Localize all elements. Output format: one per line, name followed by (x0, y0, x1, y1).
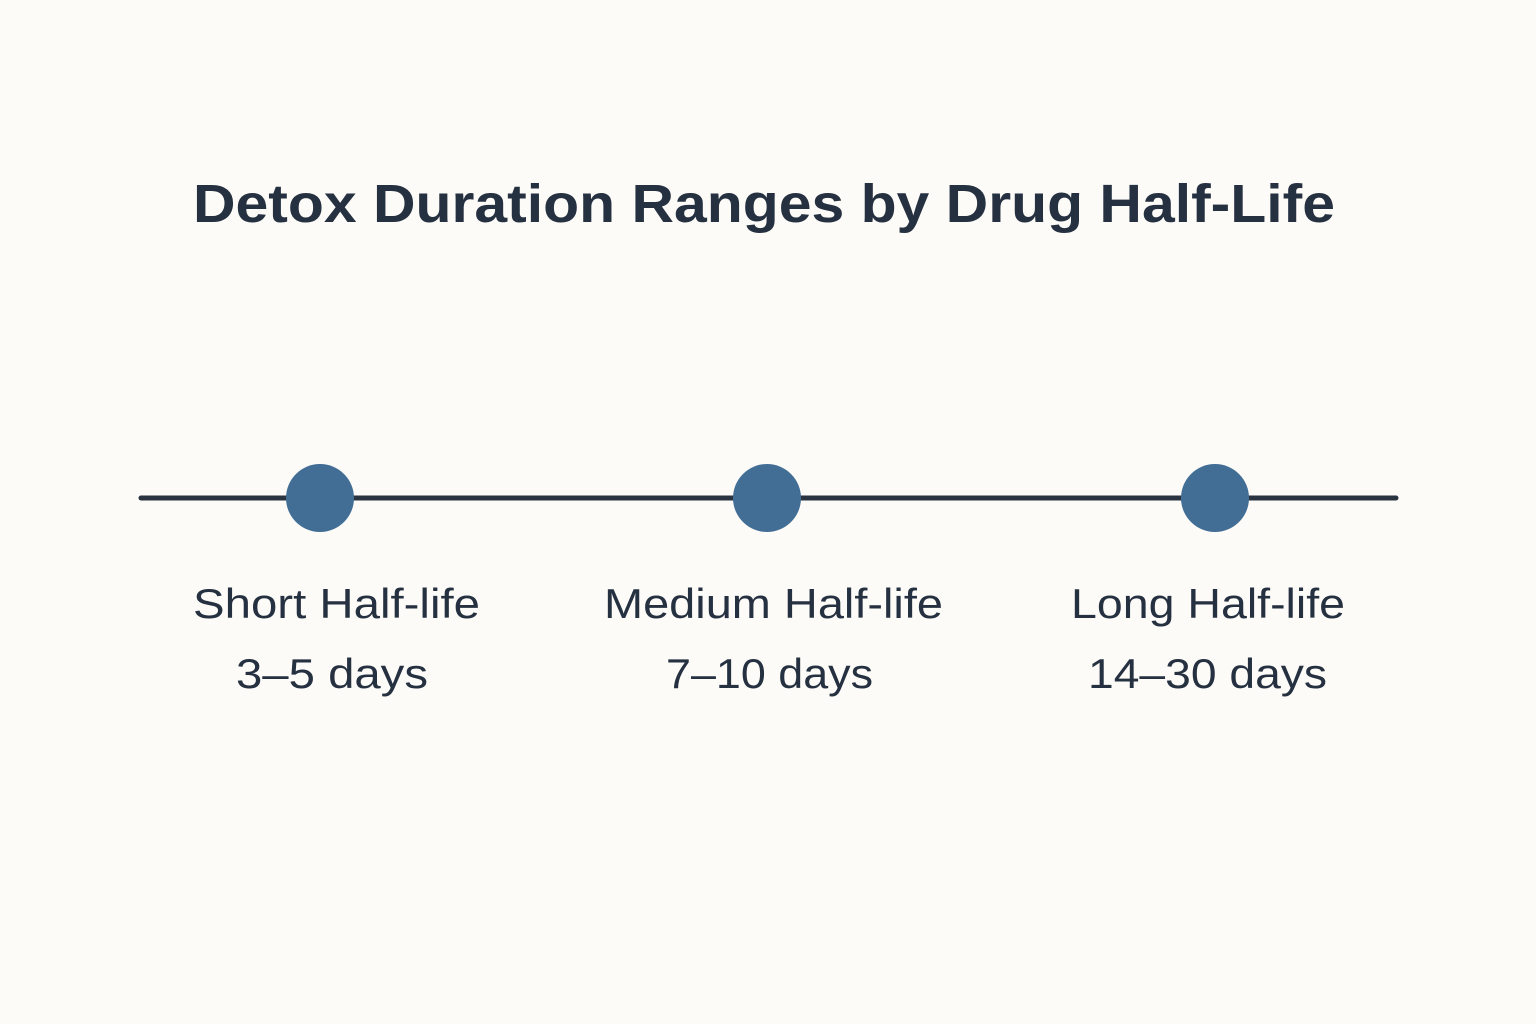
timeline line (141, 496, 1396, 500)
label: medium half-life: Medium Half-life (604, 580, 943, 627)
label: short half-life: 3–5 days (236, 650, 428, 697)
label: long half-life: Long Half-life (1071, 580, 1345, 627)
label: long half-life: 14–30 days (1088, 650, 1327, 697)
marker: medium (733, 464, 801, 532)
label: short half-life: Short Half-life (193, 580, 480, 627)
label: medium half-life: 7–10 days (666, 650, 873, 697)
title: Detox Duration Ranges by Drug Half-Life (193, 174, 1335, 234)
label: medium half-life (604, 580, 943, 697)
marker: short (286, 464, 354, 532)
marker: long (1181, 464, 1249, 532)
label: short half-life (193, 580, 480, 697)
label: long half-life (1071, 580, 1345, 697)
